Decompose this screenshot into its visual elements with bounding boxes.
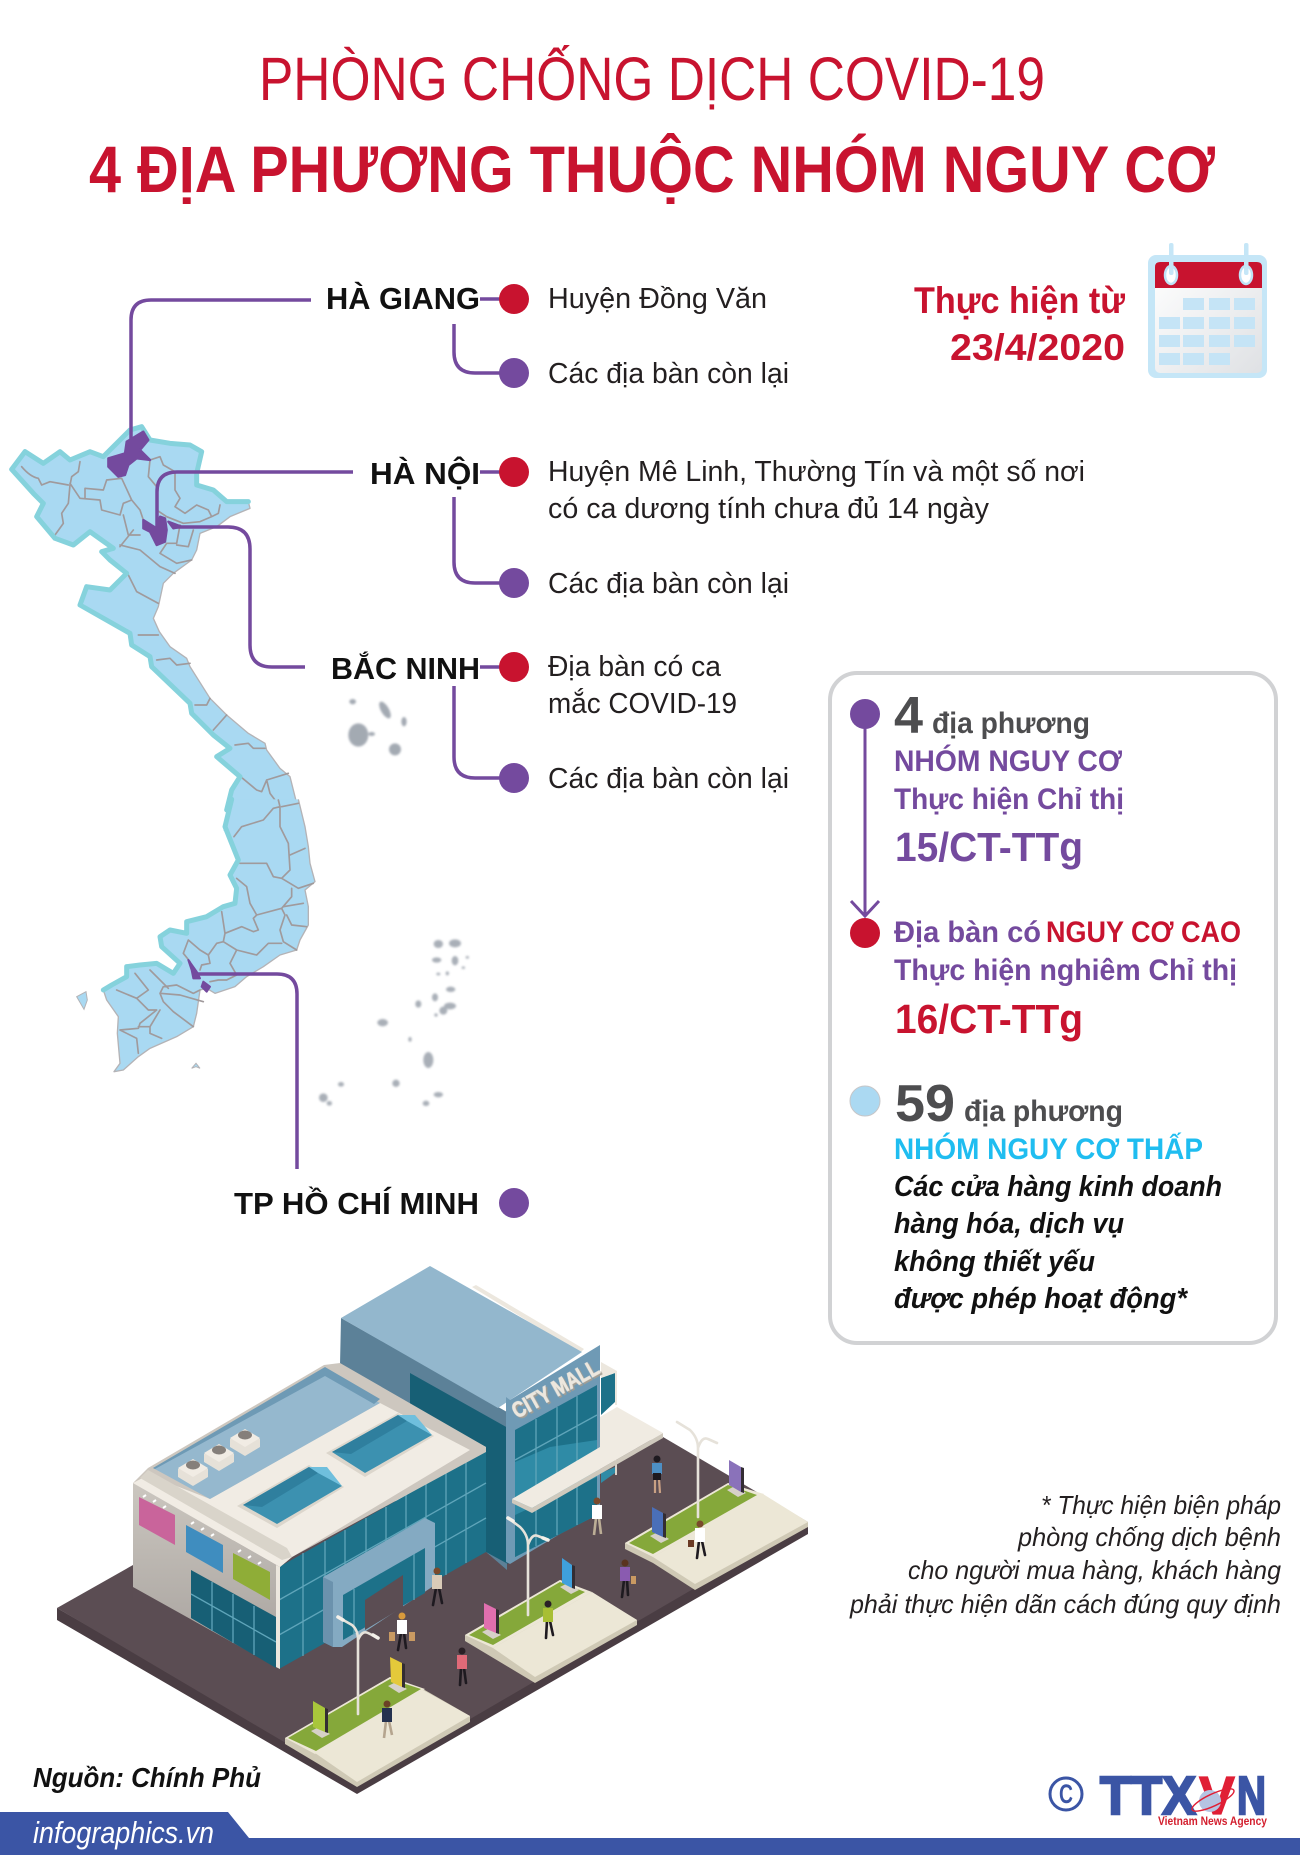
branch lines <box>454 472 505 583</box>
red dot text: Huyện Mê Linh, Thường Tín và một số nơi <box>548 456 1085 488</box>
branch lines <box>454 299 505 373</box>
entrance canopy <box>512 1407 663 1513</box>
text: 4 localities: 15/CT-TTg <box>895 824 1083 870</box>
connector: Bắc Ninh to map <box>175 527 305 667</box>
copyright mark <box>1050 1778 1082 1810</box>
icon: calendar <box>1148 243 1267 378</box>
text: 4 localities: 4 <box>894 687 923 745</box>
wordmark: V <box>1199 1766 1235 1826</box>
map: Phú Quốc and Côn Đảo <box>77 992 200 1068</box>
low block left wall <box>133 1483 280 1669</box>
group: Hà Giang <box>326 281 789 390</box>
wordmark: TTX <box>1100 1766 1196 1826</box>
source: Nguồn: Chính Phủ <box>33 1762 261 1793</box>
text: high risk area: Địa bàn có <box>894 916 1041 949</box>
panel: risk groups <box>830 673 1276 1343</box>
map: Hà Giang highlight <box>108 432 150 477</box>
pedestrians <box>382 1456 705 1738</box>
text: 59 localities: NHÓM NGUY CƠ THẤP <box>894 1132 1203 1166</box>
date text <box>914 280 1125 368</box>
purple dot <box>499 568 529 598</box>
title line 1: PHÒNG CHỐNG DỊCH COVID-19 <box>259 45 1045 113</box>
text: 59 localities: địa phương <box>964 1095 1123 1128</box>
map: Hà Nội highlight <box>143 517 167 545</box>
footnote <box>849 1490 1282 1619</box>
footnote: cho người mua hàng, khách hàng <box>908 1555 1282 1585</box>
text: 59 localities: không thiết yếu <box>894 1246 1095 1278</box>
purple dot <box>499 1188 529 1218</box>
text: 4 localities <box>894 687 1124 870</box>
dot: risk group <box>850 699 880 729</box>
air conditioners <box>178 1429 260 1486</box>
label Bắc Ninh: BẮC NINH <box>331 650 480 686</box>
text: 59 localities: 59 <box>895 1075 955 1133</box>
illustration: city mall <box>57 1266 808 1794</box>
billboards <box>139 1495 270 1600</box>
purple dot <box>499 358 529 388</box>
purple dot text: Các địa bàn còn lại <box>548 358 789 390</box>
arrow: risk group to high risk area <box>851 720 879 916</box>
group: Hà Nội <box>370 455 1085 600</box>
red dot text: Huyện Đồng Văn <box>548 283 767 315</box>
group: TP Hồ Chí Minh <box>234 1185 529 1221</box>
text: high risk area: 16/CT-TTg <box>895 996 1083 1042</box>
red dot <box>499 284 529 314</box>
text: 59 localities <box>894 1075 1222 1315</box>
map: northern part <box>12 427 407 831</box>
connector: Hà Nội to map <box>157 472 353 528</box>
sidewalk back <box>625 1483 808 1590</box>
plaza ground <box>57 1437 808 1794</box>
map: Bắc Ninh highlight <box>168 522 182 528</box>
map: southern part <box>77 799 469 1106</box>
map: Hoàng Sa islands <box>348 699 407 755</box>
red dot <box>499 457 529 487</box>
wordmark: N <box>1237 1766 1266 1826</box>
group: Bắc Ninh <box>331 650 789 795</box>
logo: TTXVN <box>1050 1766 1267 1828</box>
wordmark <box>1100 1766 1266 1826</box>
text: high risk area: NGUY CƠ CAO <box>1046 916 1241 949</box>
sidewalk front <box>285 1677 470 1787</box>
text: 59 localities: được phép hoạt động* <box>894 1283 1189 1315</box>
advertising signs <box>311 1460 746 1738</box>
label Hà Nội: HÀ NỘI <box>370 455 480 491</box>
label Hà Giang: HÀ GIANG <box>326 281 480 316</box>
agency name: Vietnam News Agency <box>1158 1814 1267 1828</box>
low block roof <box>133 1363 486 1567</box>
skylights <box>237 1413 434 1528</box>
group: Hà Nội: có ca dương tính chưa đủ 14 ngày <box>548 493 989 525</box>
entrance portal <box>323 1518 435 1647</box>
footnote: phải thực hiện dãn cách đúng quy định <box>849 1589 1281 1619</box>
footer bar <box>0 1812 1300 1855</box>
date text: 23/4/2020 <box>950 327 1125 368</box>
text: high risk area: Thực hiện nghiêm Chỉ thị <box>894 954 1237 987</box>
text: 59 localities: Các cửa hàng kinh doanh <box>894 1171 1222 1203</box>
footnote: * Thực hiện biện pháp <box>1041 1490 1281 1520</box>
sidewalk middle <box>465 1580 637 1683</box>
purple dot text: Các địa bàn còn lại <box>548 568 789 600</box>
sign lettering: CITY MALL <box>507 1355 603 1423</box>
connector: TP Hồ Chí Minh to map <box>197 974 297 1169</box>
text: 4 localities: Thực hiện Chỉ thị <box>894 783 1124 816</box>
map: TP Hồ Chí Minh highlight <box>188 960 210 992</box>
website: infographics.vn <box>33 1815 214 1850</box>
dot: low risk group <box>850 1086 880 1116</box>
date text: Thực hiện từ <box>914 280 1125 321</box>
red dot <box>499 652 529 682</box>
purple dot <box>499 763 529 793</box>
text: high risk area <box>894 916 1241 1042</box>
tall block <box>340 1266 584 1570</box>
text: 4 localities: địa phương <box>932 707 1090 740</box>
group: Bắc Ninh: mắc COVID-19 <box>548 687 737 720</box>
tower front <box>506 1345 617 1564</box>
branch lines <box>454 667 505 778</box>
text: 59 localities: hàng hóa, dịch vụ <box>894 1208 1124 1240</box>
purple dot text: Các địa bàn còn lại <box>548 763 789 795</box>
connector: Hà Giang to map <box>131 300 311 445</box>
dot: high risk area <box>850 918 880 948</box>
label TP Hồ Chí Minh: TP HỒ CHÍ MINH <box>234 1185 479 1221</box>
low block glass wall <box>279 1450 486 1669</box>
footnote: phòng chống dịch bệnh <box>1017 1522 1281 1552</box>
map of Vietnam <box>12 427 469 1106</box>
map: Trường Sa islands <box>319 939 469 1106</box>
copyright mark: C <box>1059 1779 1073 1809</box>
street lamps <box>338 1422 717 1714</box>
red dot text: Địa bàn có ca <box>548 651 722 683</box>
text: 4 localities: NHÓM NGUY CƠ <box>894 744 1122 778</box>
